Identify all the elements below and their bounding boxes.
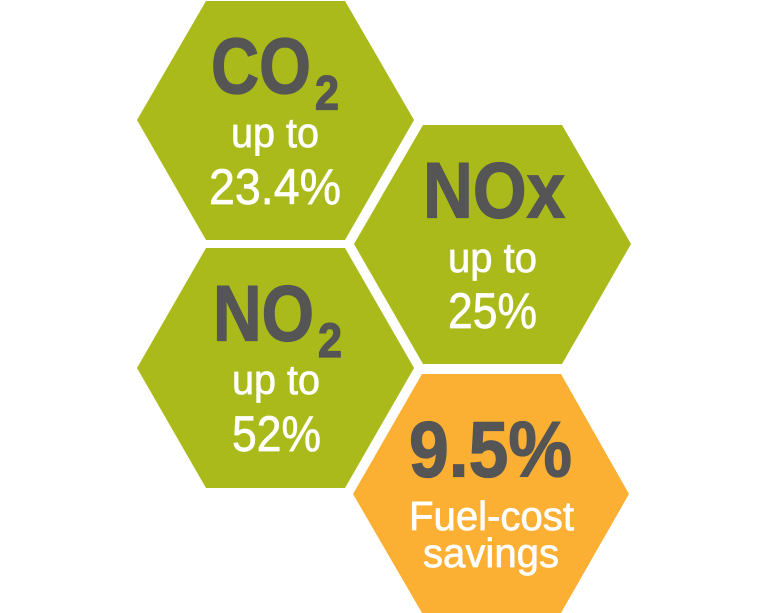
panel: NOx hexagon <box>354 125 631 364</box>
heading: NO2: 2 <box>318 315 342 368</box>
panel: fuel-cost savings hexagon <box>353 374 629 613</box>
heading: NO2: NO <box>213 268 314 358</box>
hexagon shape: NO2 <box>137 248 414 488</box>
value: 25%: 25% <box>448 283 537 339</box>
panel: CO2 hexagon <box>137 1 414 240</box>
heading: CO2: CO <box>211 21 311 110</box>
hexagon shape: fuel-cost savings <box>353 374 629 613</box>
hexagon shape: NOx <box>354 125 631 364</box>
text: Fuel-cost: Fuel-cost <box>409 493 575 539</box>
heading: NOx: NOx <box>423 146 565 234</box>
text: up to: up to <box>232 356 320 403</box>
heading: CO2: 2 <box>315 68 339 120</box>
value: 23.4%: 23.4% <box>209 159 341 215</box>
text: up to: up to <box>231 109 319 156</box>
text: savings: savings <box>423 530 559 576</box>
hexagon shape: CO2 <box>137 1 414 240</box>
value: 52%: 52% <box>232 406 321 462</box>
panel: NO2 hexagon <box>137 248 414 488</box>
text: up to: up to <box>448 234 537 281</box>
heading: 9.5%: 9.5% <box>409 404 572 494</box>
